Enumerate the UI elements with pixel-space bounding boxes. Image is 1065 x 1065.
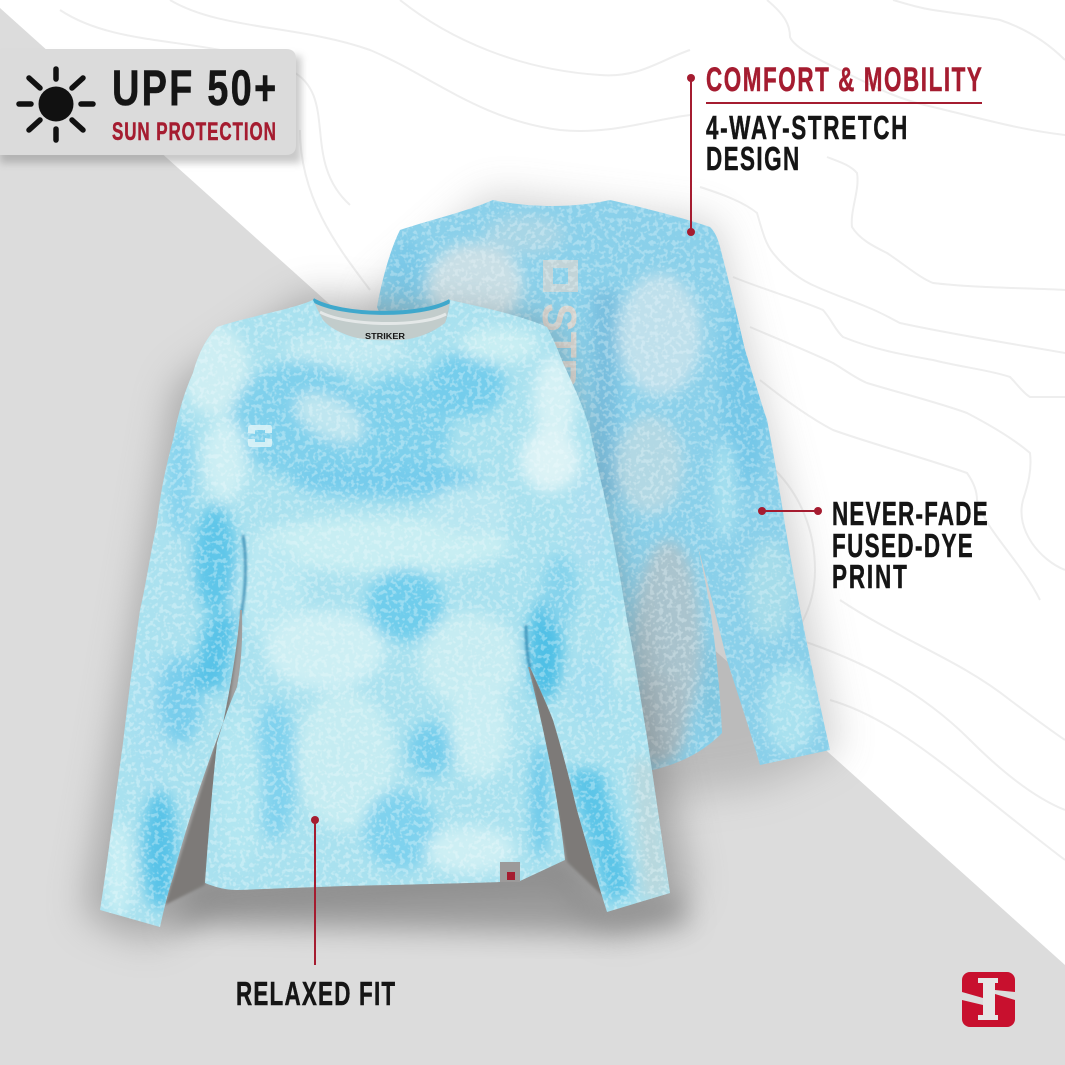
callout dots (687, 74, 695, 236)
callout rule (706, 102, 982, 104)
collar label: STRIKER (365, 332, 405, 341)
front shirt print blobs (104, 324, 672, 920)
callout: relaxed fit (236, 816, 395, 1012)
front shirt collar interior (313, 300, 450, 345)
callout dot (311, 816, 319, 824)
badge: UPF 50+ sun protection (0, 49, 301, 163)
callout text: NEVER-FADE (832, 495, 988, 532)
front shirt armpit seams (241, 535, 530, 668)
callout text: FUSED-DYE (832, 527, 973, 564)
back shirt print blobs (385, 215, 816, 764)
callout text: RELAXED FIT (236, 975, 395, 1012)
back shirt (370, 190, 840, 780)
heading: UPF 50+: UPF 50+ (112, 61, 276, 116)
shadow: back shirt (370, 195, 838, 800)
front shirt hem tag (500, 862, 520, 882)
callout leader line (314, 820, 316, 965)
callout: comfort and mobility (687, 61, 982, 236)
callout text: 4-WAY-STRETCH (706, 109, 907, 146)
callout text (706, 109, 907, 177)
callout leader line (690, 78, 692, 232)
back shirt speckle texture (370, 190, 840, 780)
background: topographic contour lines (60, 0, 1065, 860)
badge shadow (0, 56, 301, 163)
front shirt chest logo (248, 425, 272, 447)
callout dots (758, 507, 822, 515)
callout heading: COMFORT & MOBILITY (706, 61, 982, 99)
front shirt speckle texture (95, 295, 680, 935)
callout: never-fade fused-dye print (758, 495, 988, 595)
back shirt logo text: STR (532, 303, 586, 389)
badge panel (0, 49, 296, 155)
callout text: PRINT (832, 558, 907, 595)
shadow: under front hem (165, 855, 690, 935)
icon: brand S logo (962, 972, 1015, 1027)
back shirt logo mark (543, 260, 578, 292)
callout text: DESIGN (706, 140, 799, 177)
subheading: sun protection: SUN PROTECTION (112, 118, 276, 146)
icon: sun (19, 69, 93, 140)
shadow: gaps between sleeves and body (165, 610, 612, 905)
shadow: front shirt (85, 296, 690, 940)
callout text (832, 495, 988, 595)
callout leader line (762, 510, 818, 512)
front shirt (95, 295, 680, 935)
